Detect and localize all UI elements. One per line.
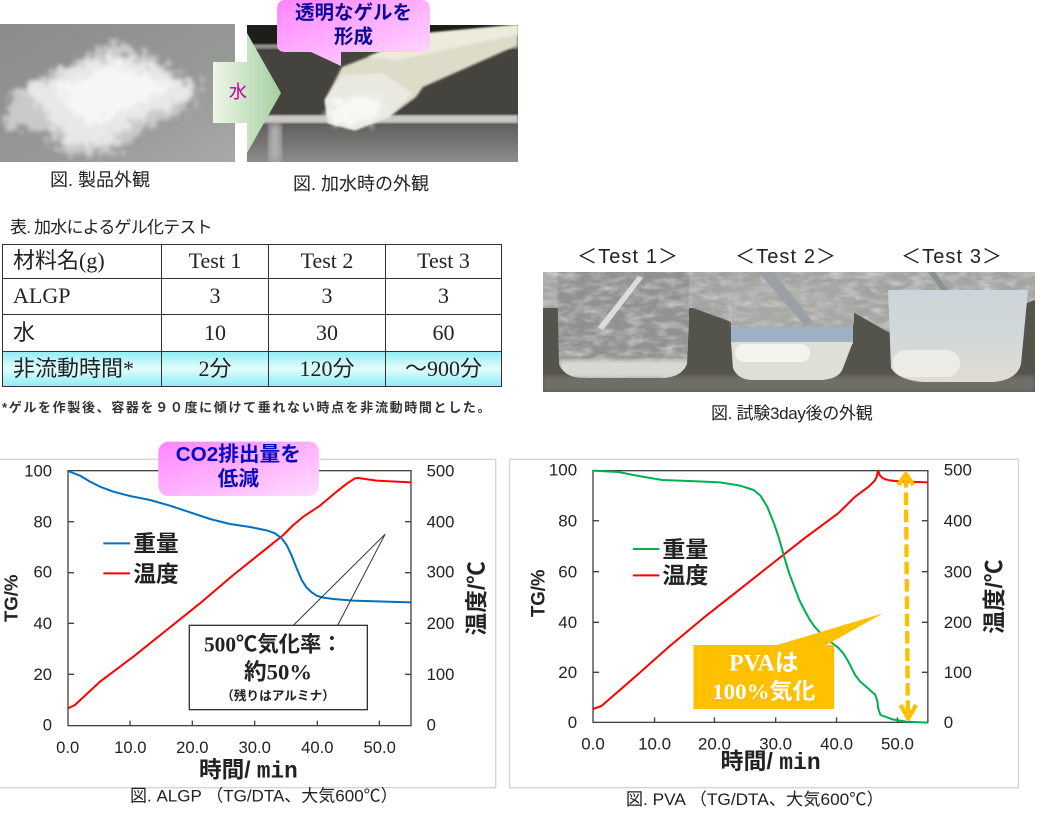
table: gelation test: 3 <box>438 283 449 308</box>
callout: CO2 reduction <box>158 442 319 496</box>
x axis labels <box>581 735 914 754</box>
water label: 水 <box>229 82 247 102</box>
x axis labels: 0.0 <box>56 738 79 757</box>
x axis labels: 20.0 <box>698 735 731 754</box>
axis title: time: 時間/ min <box>199 757 298 785</box>
x axis labels: 50.0 <box>881 735 914 754</box>
callout: transparent gel: 透明なゲルを <box>295 2 412 24</box>
right axis labels: 200 <box>427 614 454 633</box>
y axis labels: 40 <box>33 614 52 633</box>
x axis labels: 20.0 <box>176 738 209 757</box>
legend: 温度 <box>133 561 179 587</box>
photo: gel on spatula <box>247 25 518 162</box>
y axis labels: 0 <box>568 713 577 732</box>
table: gelation test: Test 1 <box>189 248 241 273</box>
x axis labels: 40.0 <box>820 735 853 754</box>
axis title: temperature: 温度/℃ <box>981 559 1007 634</box>
x axis labels <box>56 738 396 757</box>
x axis labels: 10.0 <box>114 738 147 757</box>
caption: after 3 days: 図. 試験3day後の外観 <box>711 404 872 423</box>
footnote: *ゲルを作製後、容器を９０度に傾けて垂れない時点を非流動時間とした。 <box>2 400 492 415</box>
legend <box>633 536 709 589</box>
legend: 重量 <box>133 531 179 557</box>
right axis labels: 0 <box>427 716 436 735</box>
table: gelation test: Test 2 <box>301 248 353 273</box>
x axis labels: 50.0 <box>363 738 396 757</box>
callout: vaporization <box>189 534 385 710</box>
y axis labels: 40 <box>558 613 577 632</box>
x axis labels: 30.0 <box>238 738 271 757</box>
legend: 温度 <box>662 563 709 589</box>
y axis labels: 0 <box>43 716 52 735</box>
label: test 3: ＜Test 3＞ <box>901 246 1003 268</box>
photo: test beakers <box>543 272 1035 392</box>
right axis labels: 100 <box>427 665 454 684</box>
x axis labels: 10.0 <box>638 735 671 754</box>
table: gelation test: 3 <box>210 283 220 308</box>
legend: 重量 <box>662 536 708 562</box>
arrow: add water <box>213 33 281 153</box>
photo: product powder <box>0 24 235 162</box>
callout: transparent gel <box>277 0 430 66</box>
table: gelation test: 10 <box>204 320 226 345</box>
table: gelation test: 3 <box>322 283 332 308</box>
table: gelation test: 30 <box>316 320 338 345</box>
y axis labels: 100 <box>24 461 52 480</box>
callout: PVA vaporizes: 100%気化 <box>712 679 816 704</box>
axis title: temperature: 温度/℃ <box>464 561 490 635</box>
callout: CO2 reduction: 低減 <box>218 467 259 491</box>
callout: vaporization: 約50% <box>244 659 312 684</box>
table: gelation test: 材料名(g) <box>13 248 105 273</box>
callout: PVA vaporizes <box>693 613 883 709</box>
y axis labels <box>24 461 52 735</box>
axis title: TG: TG/% <box>0 574 21 622</box>
table: gelation test: 水 <box>13 320 35 345</box>
right axis labels <box>944 461 972 732</box>
y axis labels: 60 <box>558 562 577 581</box>
label: test 2: ＜Test 2＞ <box>735 246 837 268</box>
right axis labels: 300 <box>427 563 454 582</box>
line: weight <box>593 471 928 723</box>
y axis labels: 100 <box>549 461 577 480</box>
beaker: test 2 <box>729 272 854 380</box>
right axis labels: 100 <box>944 663 972 682</box>
table: gelation test: 60 <box>432 320 454 345</box>
right axis labels: 500 <box>427 461 454 480</box>
callout: PVA vaporizes: PVAは <box>729 651 798 677</box>
arrow: dashed double <box>898 474 916 719</box>
caption: water added: 図. 加水時の外観 <box>293 174 429 194</box>
table: gelation test: Test 3 <box>417 248 470 273</box>
legend <box>103 531 179 587</box>
chart: PVA panel <box>508 458 1020 809</box>
beaker: test 3 <box>888 272 1028 382</box>
right axis labels: 200 <box>944 613 972 632</box>
beaker: test 1 <box>557 272 689 378</box>
line: temperature <box>68 478 411 708</box>
callout: transparent gel: 形成 <box>334 26 373 48</box>
caption: PVA: 図. PVA （TG/DTA、大気600℃） <box>626 790 884 809</box>
y axis labels: 60 <box>33 563 52 582</box>
table: gelation test: 120分 <box>299 356 354 381</box>
axis title: TG: TG/% <box>528 569 549 617</box>
line: weight <box>68 471 411 602</box>
y axis labels: 80 <box>33 512 52 531</box>
x axis labels: 40.0 <box>301 738 334 757</box>
label: test 1: ＜Test 1＞ <box>577 246 679 268</box>
right axis labels: 300 <box>944 562 972 581</box>
callout: vaporization: （残りはアルミナ） <box>221 688 335 703</box>
table: gelation test: ALGP <box>13 283 70 308</box>
caption: ALGP: 図. ALGP （TG/DTA、大気600℃） <box>130 787 398 806</box>
table: gelation test <box>2 244 502 387</box>
table: gelation test: 非流動時間* <box>13 356 134 381</box>
right axis labels: 500 <box>944 461 972 480</box>
table: gelation test: 2分 <box>198 356 232 381</box>
callout: vaporization: 500℃気化率： <box>204 633 343 657</box>
callout: CO2 reduction: CO2排出量を <box>176 443 301 466</box>
chart: ALGP panel <box>0 442 496 806</box>
x axis labels: 30.0 <box>759 735 792 754</box>
right axis labels: 400 <box>427 512 454 531</box>
y axis labels: 80 <box>558 511 577 530</box>
line: temperature <box>593 471 928 709</box>
y axis labels: 20 <box>33 665 52 684</box>
y axis labels <box>549 461 577 732</box>
x axis labels: 0.0 <box>581 735 605 754</box>
right axis labels: 0 <box>944 713 953 732</box>
caption: product: 図. 製品外観 <box>50 170 150 190</box>
axis title: time: 時間/ min <box>720 748 821 776</box>
table title: 表. 加水によるゲル化テスト <box>10 218 212 237</box>
y axis labels: 20 <box>558 663 577 682</box>
table: gelation test: ～900分 <box>405 356 482 381</box>
right axis labels <box>427 461 454 735</box>
right axis labels: 400 <box>944 511 972 530</box>
